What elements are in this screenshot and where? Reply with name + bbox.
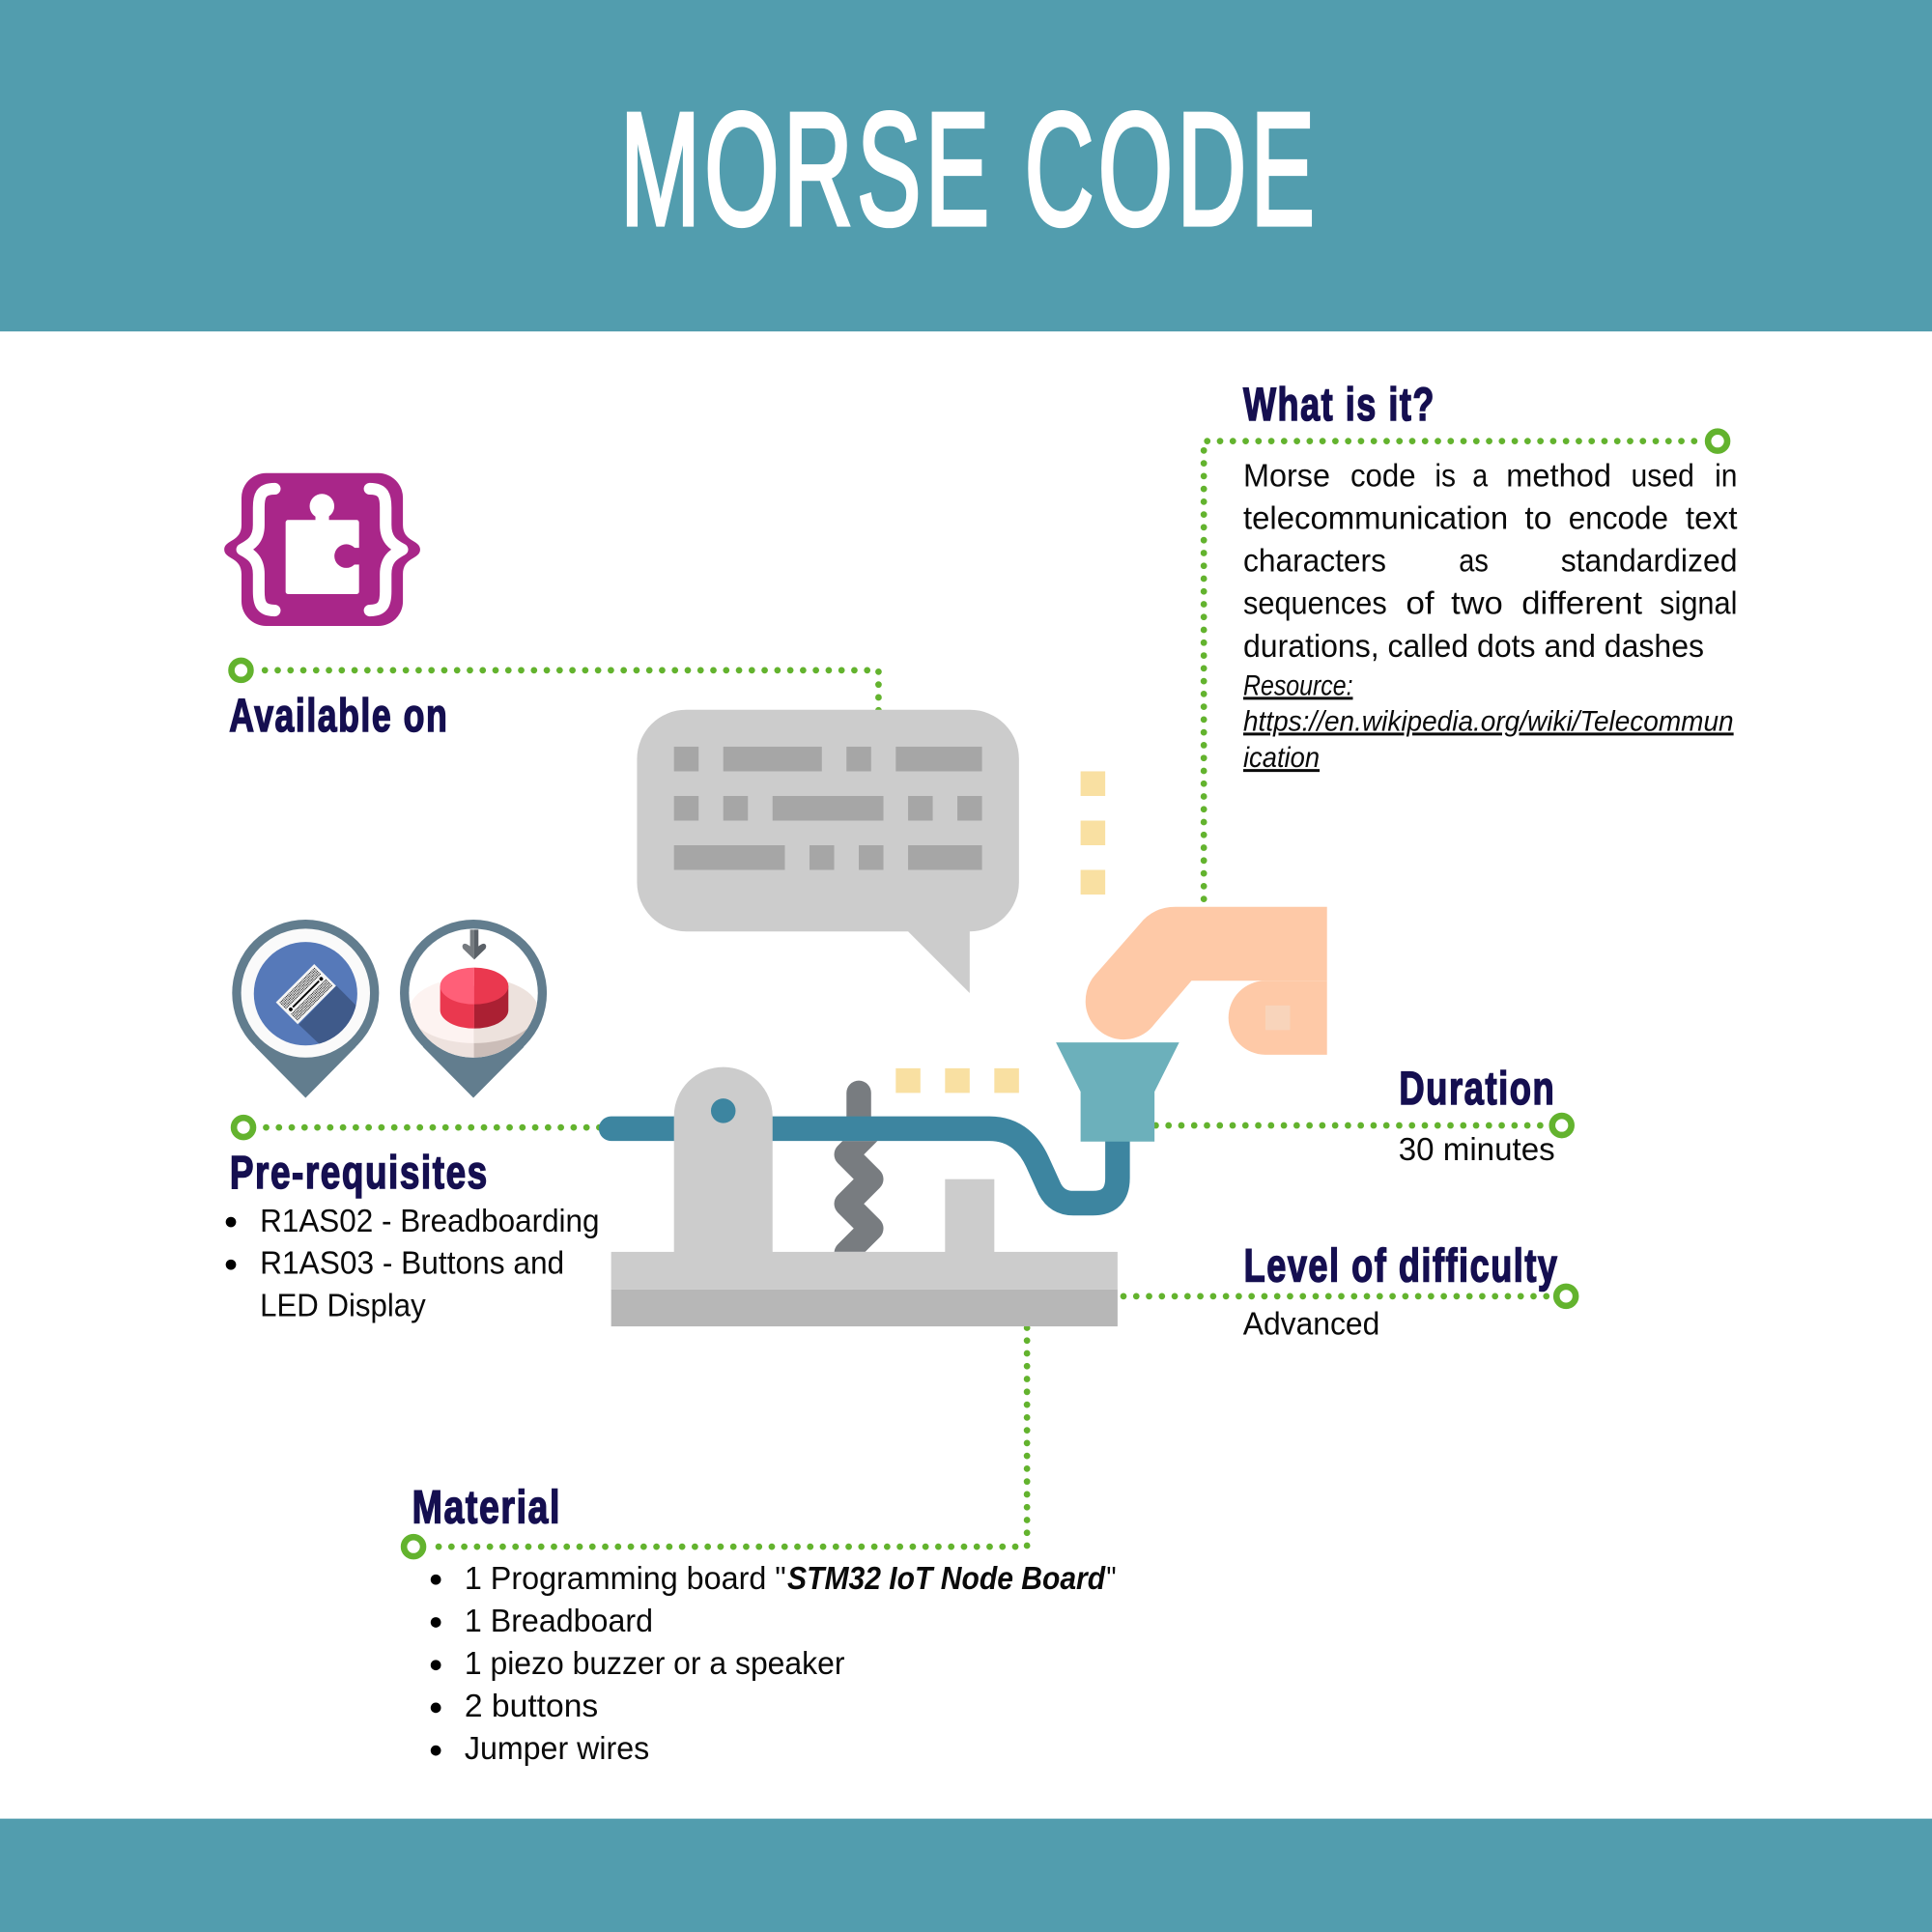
list: material: 1 Breadboard <box>465 1604 653 1639</box>
text block: definition: is <box>1435 458 1456 494</box>
text block: definition: a <box>1472 458 1489 494</box>
icon: breadboard pin <box>232 920 385 1097</box>
text block: definition: method <box>1506 458 1611 494</box>
text block: definition <box>1243 458 1737 665</box>
footer band <box>0 1819 1932 1932</box>
speech bubble with morse code <box>637 710 1019 993</box>
text block: resource link: Resource: <box>1243 669 1353 701</box>
buzzer speaker <box>1056 1042 1179 1142</box>
text block: definition: code <box>1350 458 1416 494</box>
text block: definition: in <box>1715 458 1737 494</box>
title: MORSE CODE <box>620 80 1319 259</box>
connector: available on <box>232 661 878 720</box>
text block: definition: text <box>1686 500 1737 536</box>
text block: definition: Morse <box>1243 458 1330 494</box>
lever arm <box>611 1128 1118 1204</box>
vertical signal dots <box>1081 771 1105 895</box>
text block: definition: signal <box>1660 586 1737 622</box>
list: material <box>431 1561 1117 1767</box>
contact post <box>945 1179 994 1256</box>
list: pre-requisites: R1AS03 - Buttons and <box>260 1245 564 1281</box>
header band <box>0 0 1932 331</box>
text: duration value: 30 minutes <box>1399 1132 1555 1168</box>
icon: push button pin <box>400 920 547 1097</box>
connector: duration <box>1140 1116 1572 1135</box>
heading: material: Material <box>412 1482 561 1534</box>
telegraph key <box>611 1067 1118 1326</box>
connector: level of difficulty <box>1122 1287 1576 1306</box>
text: difficulty value: Advanced <box>1243 1306 1379 1342</box>
list: pre-requisites <box>226 1204 600 1324</box>
spring <box>846 1081 871 1253</box>
list: material: 1 piezo buzzer or a speaker <box>465 1646 844 1682</box>
heading: what is it: What is it? <box>1243 379 1435 431</box>
text block: definition: encode <box>1569 500 1668 536</box>
text block: definition: telecommunication <box>1243 500 1508 536</box>
list: material: " <box>1106 1561 1117 1597</box>
connector: material <box>404 1316 1027 1556</box>
list: pre-requisites: R1AS02 - Breadboarding <box>260 1204 600 1239</box>
heading: level of difficulty: Level of difficulty <box>1244 1240 1559 1293</box>
text block: definition: standardized <box>1561 544 1737 580</box>
connector: pre-requisites <box>234 1118 610 1137</box>
icon: hand pressing key <box>1086 907 1327 1055</box>
text block: definition: as <box>1459 544 1489 580</box>
text block: definition: different <box>1521 586 1642 622</box>
text block: definition: two <box>1451 586 1503 622</box>
list: material: STM32 IoT Node Board <box>787 1561 1106 1597</box>
text block: resource link: ication <box>1243 742 1320 774</box>
text block: definition: characters <box>1243 544 1386 580</box>
heading: pre-requisites: Pre-requisites <box>230 1147 489 1199</box>
base <box>611 1252 1118 1326</box>
text block: resource link: https://en.wikipedia.org/wiki/Telecommun <box>1243 705 1734 737</box>
list: material: 1 Programming board " <box>465 1561 786 1597</box>
list: material: 2 buttons <box>465 1689 598 1724</box>
heading: duration: Duration <box>1399 1063 1555 1115</box>
horizontal signal dots <box>895 1068 1019 1093</box>
icon: purple puzzle block <box>224 473 420 626</box>
connector: what is it <box>1204 432 1727 917</box>
list: material: Jumper wires <box>465 1731 649 1767</box>
pivot post <box>674 1067 773 1257</box>
text block: definition: to <box>1524 500 1552 536</box>
text block: definition: of <box>1406 586 1435 622</box>
text block: resource link <box>1243 669 1734 774</box>
text block: definition: durations, called dots and dashes <box>1243 629 1704 665</box>
text block: definition: used <box>1632 458 1694 494</box>
text block: definition: sequences <box>1243 586 1387 622</box>
list: pre-requisites: LED Display <box>260 1289 426 1324</box>
heading: available on: Available on <box>229 690 448 742</box>
